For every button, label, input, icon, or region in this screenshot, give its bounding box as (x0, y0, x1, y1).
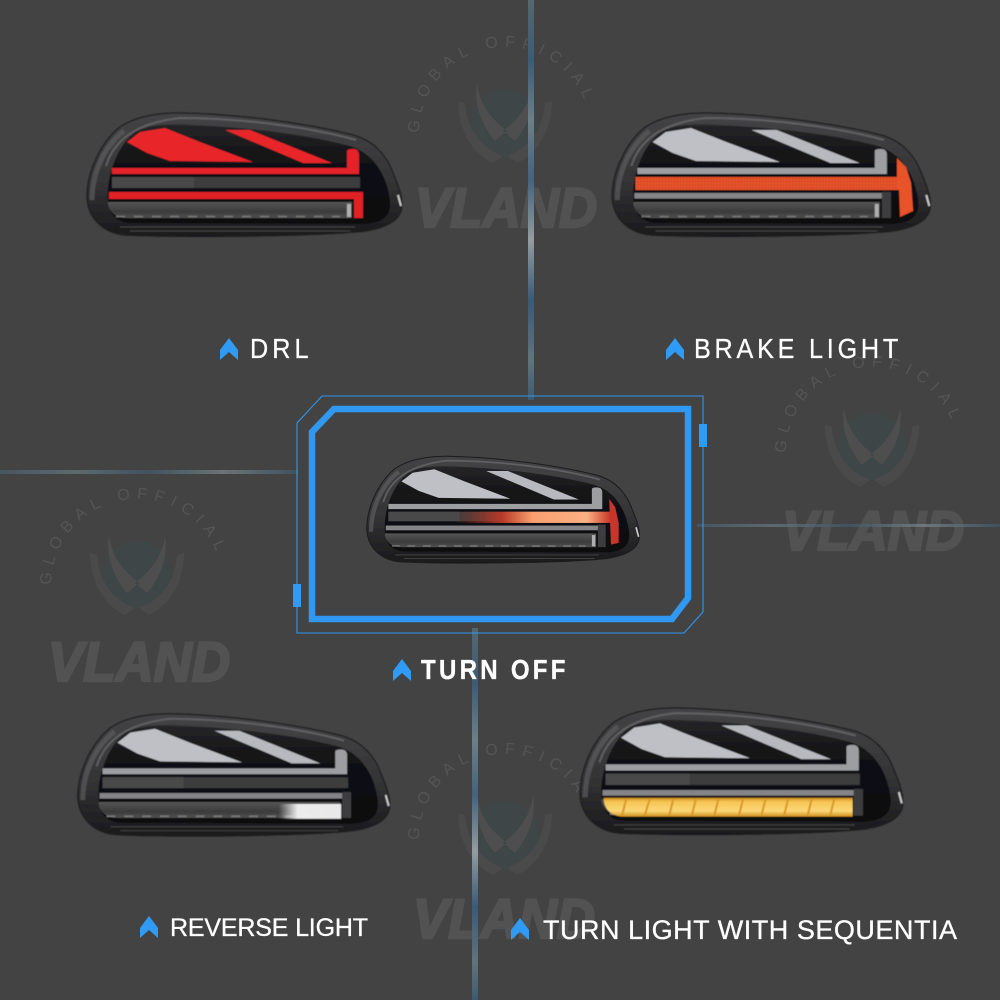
label: TURN OFF: TURN OFF (421, 653, 565, 685)
frame tab right (699, 424, 707, 447)
watermark: top centre: VLAND (415, 176, 597, 239)
watermark: left (40, 488, 230, 693)
watermark: top centre: GLOBAL OFFICIAL (408, 36, 592, 132)
watermark: right: GLOBAL OFFICIAL (775, 356, 958, 452)
red tip (609, 499, 619, 545)
tail light: turn off (367, 456, 640, 563)
white reverse segment (279, 804, 341, 819)
orange brake bar (635, 158, 913, 217)
label: BRAKE LIGHT: BRAKE LIGHT (694, 333, 898, 364)
label: DRL (220, 333, 308, 364)
tail light: reverse light (78, 714, 390, 836)
red lower bar (109, 192, 363, 218)
glowing bar (456, 512, 610, 523)
red upper bar (112, 149, 359, 174)
label: REVERSE LIGHT: REVERSE LIGHT (170, 914, 368, 942)
watermark: right: VLAND (782, 499, 964, 562)
amber sequential strip (604, 798, 853, 817)
watermark: bottom centre: VLAND (413, 887, 595, 950)
watermark: bottom centre: GLOBAL OFFICIAL (408, 743, 580, 838)
light strip: bottom vertical (472, 628, 478, 1000)
centre frame (293, 396, 707, 633)
watermark: bottom centre (408, 743, 595, 950)
light strip: top vertical (528, 0, 534, 400)
thick inner frame (312, 409, 688, 619)
watermark: right (775, 356, 964, 562)
thin outer frame (297, 396, 703, 633)
watermark: left: GLOBAL OFFICIAL (40, 488, 224, 584)
watermark: top centre (408, 36, 597, 239)
red upper stripes (127, 128, 332, 163)
light strip: right horizontal (697, 524, 1000, 527)
tail light: turn light sequential (580, 708, 903, 835)
label: DRL: DRL (250, 333, 309, 364)
watermark: left: VLAND (48, 630, 230, 693)
light strip: left horizontal (0, 470, 298, 474)
tail light: DRL (87, 113, 402, 236)
label: TURN LIGHT WITH SEQUENTIA: TURN LIGHT WITH SEQUENTIA (543, 915, 957, 945)
tail light: brake light (612, 113, 930, 236)
frame tab left (293, 584, 301, 607)
